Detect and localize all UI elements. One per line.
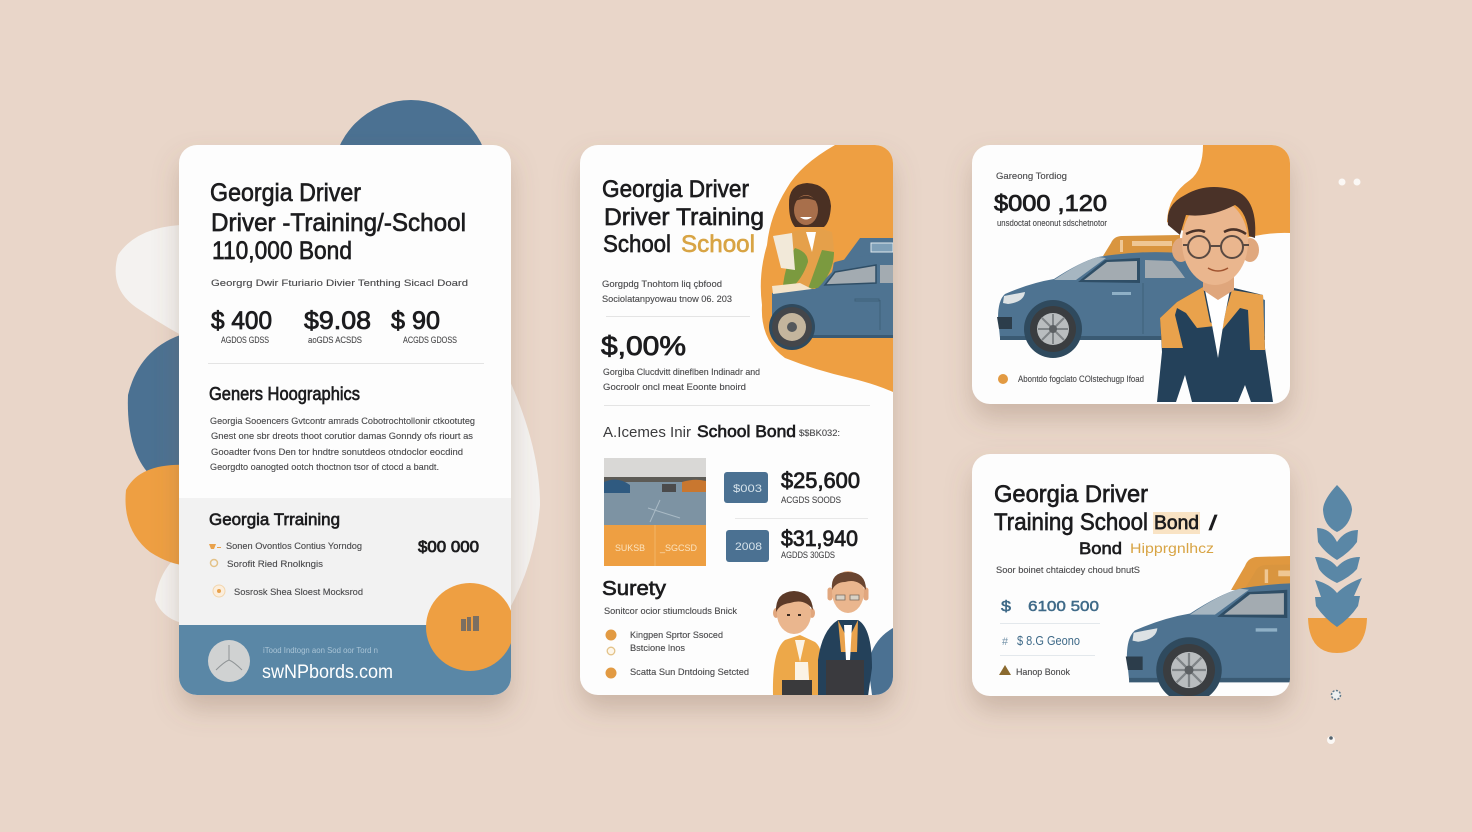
- card one paragraph: [210, 416, 475, 472]
- orange blob: [1167, 145, 1290, 240]
- card four title: Georgia Driver: [994, 481, 1148, 508]
- card four title: Bond: [1154, 513, 1199, 534]
- photo tile with road and cars: [604, 458, 706, 566]
- card one stats row: aoGDS ACSDS: [308, 335, 362, 345]
- card two section heading: A.Icemes Inir: [603, 424, 691, 441]
- training section background: [179, 498, 511, 626]
- card one paragraph: Gooadter fvons Den tor hndtre sonutdeos otndoclor eocdind: [211, 447, 463, 457]
- card one stats row: $ 90: [391, 307, 440, 335]
- card four title: /: [1209, 513, 1218, 535]
- woman illustration: [772, 183, 834, 294]
- card four amount rows: $: [1001, 598, 1012, 615]
- car illustration: [1126, 556, 1290, 696]
- training list: [209, 541, 363, 597]
- card one stats row: [211, 307, 457, 345]
- man illustration: [818, 571, 872, 696]
- card two intro text: Sociolatanpyowau tnow 06. 203: [602, 294, 732, 304]
- card two stat description: Gorgiba Clucdvitt dineflben Indinadr and: [603, 367, 760, 377]
- stat row two: $31,940: [781, 526, 858, 551]
- stat row two: [726, 526, 858, 562]
- small icon: gear: [1332, 690, 1340, 700]
- training amount: $00 000: [418, 539, 479, 556]
- card four description: Soor boinet chtaicdey choud bnutS: [996, 565, 1140, 575]
- card one paragraph: Georgia Sooencers Gvtcontr amrads Cobotrochtollonir ctkootuteg: [210, 416, 475, 426]
- car illustration: [997, 235, 1265, 358]
- training heading: Georgia Trraining: [209, 510, 340, 529]
- panel: bottom right card: [962, 454, 1300, 720]
- decorative plant icon: [1308, 485, 1367, 653]
- card three caption: unsdoctat oneonut sdschetnotor: [997, 218, 1107, 228]
- stat row two: 2008: [735, 541, 762, 553]
- card one stats row: AGDOS GDSS: [221, 335, 269, 345]
- surety list: Scatta Sun Dntdoing Setcted: [630, 667, 749, 677]
- card one title: Georgia Driver: [210, 179, 361, 207]
- card two stat description: Gocroolr oncl meat Eoonte bnoird: [603, 382, 746, 392]
- card one subtitle: Georgrg Dwir Fturiario Divier Tenthing Sicacl Doard: [211, 278, 468, 288]
- card one stats row: ACGDS GDOSS: [403, 335, 457, 345]
- decorative white dots: [1338, 178, 1360, 186]
- panel: top right card: [972, 145, 1290, 404]
- photo tile with road and cars: SUKSB: [615, 543, 645, 553]
- panel: left card: [179, 145, 514, 695]
- blue corner blob: [868, 628, 893, 695]
- card four orange subtitle: Hipprgnlhcz: [1130, 540, 1214, 556]
- card two title: Georgia Driver: [602, 176, 749, 203]
- photo tile with road and cars: _SGCSD: [659, 543, 697, 553]
- stat row one: $25,600: [781, 468, 860, 493]
- stat row one: $003: [733, 483, 762, 495]
- card four footnote: [999, 665, 1070, 677]
- card one paragraph: Gnest one sbr dreots thoot corutior damas Gonndy ofs riourt as: [211, 431, 474, 441]
- card four amount rows: $ 8.G Geono: [1017, 633, 1080, 648]
- orange circle with icon: [426, 583, 514, 671]
- card four amount rows: [1000, 598, 1100, 656]
- card two intro text: Gorgpdg Tnohtom liq çbfood: [602, 279, 722, 289]
- card one stats row: $ 400: [211, 307, 272, 335]
- card one paragraph: Georgdto oanogted ootch thoctnon tsor of ctocd a bandt.: [210, 462, 439, 472]
- card four amount rows: #: [1002, 636, 1009, 648]
- card two big stat: $,00%: [601, 331, 686, 361]
- card one section heading: Geners Hoographics: [209, 384, 360, 404]
- man illustration: [1157, 187, 1273, 402]
- sign on car: [844, 238, 893, 260]
- card one title: Driver -Training/-School: [211, 209, 466, 237]
- surety list: Bstcione lnos: [630, 643, 686, 653]
- blob: orange left of card one: [126, 465, 190, 566]
- training list: Sosrosk Shea Sloest Mocksrod: [234, 587, 363, 597]
- card one stats row: $9.08: [304, 307, 371, 335]
- card one title: [210, 179, 466, 265]
- footer text: iTood Indtogn aon Sod oor Tord n: [263, 646, 378, 655]
- card two title: School: [603, 231, 671, 258]
- boy illustration: [773, 591, 824, 695]
- surety list: [606, 630, 749, 678]
- card two section heading: School Bond: [697, 422, 796, 441]
- card two title: Driver Training: [604, 204, 764, 231]
- blob: blue left of card one: [128, 332, 190, 500]
- training list: Sorofit Ried Rnolkngis: [227, 559, 324, 569]
- card two intro text: [602, 279, 732, 304]
- card three amount: $000 ,120: [994, 190, 1107, 216]
- surety list: Kingpen Sprtor Ssoced: [630, 630, 723, 640]
- footer text: swNPbords.com: [262, 662, 393, 683]
- card four title: Bond: [1079, 539, 1122, 558]
- card two section heading: [603, 422, 840, 441]
- stat row two: AGDDS 30GDS: [781, 550, 835, 560]
- card two title: School: [681, 231, 755, 258]
- card two section heading: $$BK032:: [799, 428, 840, 438]
- card three footnote: Abontdo fogclato COlstechugp Ifoad: [1018, 374, 1144, 384]
- footer text: [262, 646, 393, 683]
- blob: pale shapes behind card one: [116, 225, 540, 625]
- card three label: Gareong Tordiog: [996, 171, 1067, 181]
- orange blob top right: [761, 145, 893, 392]
- footer band: [179, 625, 511, 695]
- card four title: [994, 481, 1218, 558]
- surety heading: Surety: [602, 578, 666, 600]
- training list: Sonen Ovontlos Contius Yorndog: [226, 541, 362, 551]
- stat row one: [724, 468, 860, 505]
- surety subheading: Sonitcor ocior stiumclouds Bnick: [604, 606, 738, 616]
- card four amount rows: 6100 500: [1028, 598, 1099, 615]
- footer logo: [208, 640, 250, 682]
- car illustration: [769, 253, 893, 350]
- panel: middle card: [580, 145, 893, 696]
- blob: navy top behind card one: [332, 100, 490, 260]
- card four title: Training School: [994, 509, 1148, 536]
- card two stat description: [603, 367, 760, 392]
- card two title: [602, 176, 764, 258]
- small icon: dot: [1327, 736, 1335, 744]
- card one title: 110,000 Bond: [212, 237, 352, 265]
- stat row one: ACGDS SOODS: [781, 495, 841, 505]
- card four footnote: Hanop Bonok: [1016, 667, 1070, 677]
